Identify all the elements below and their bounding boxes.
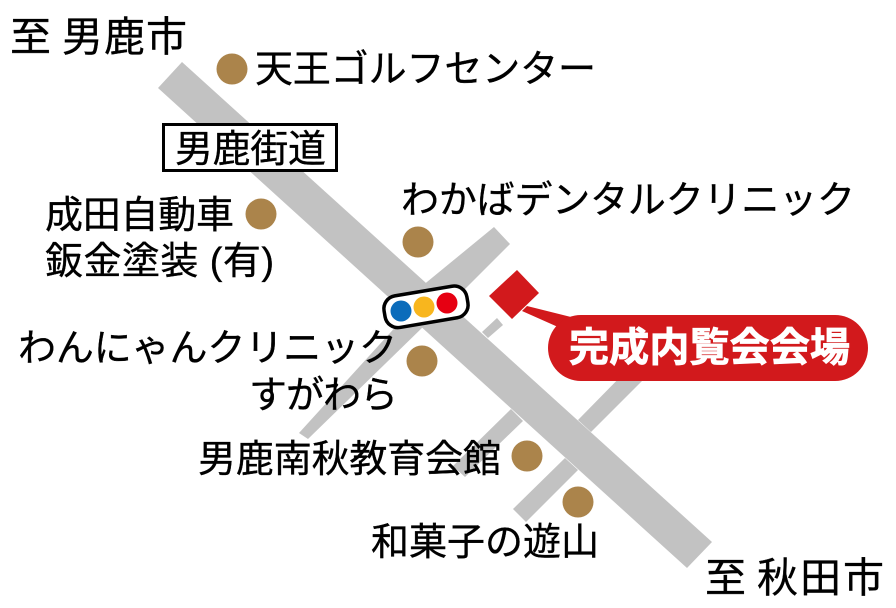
landmark dot: dental clinic [402, 226, 434, 258]
label: Narita auto body: 鈑金塗装 (有) [45, 241, 274, 283]
label: Wannyan clinic Sugawara [18, 328, 398, 417]
label: Wannyan clinic Sugawara: すがわら [249, 375, 398, 417]
label: Wakaba dental clinic: わかばデンタルクリニック [401, 180, 855, 222]
label: Wannyan clinic Sugawara: わんにゃんクリニック [18, 328, 397, 370]
landmark dot: community hall [512, 440, 542, 472]
road: lower cross street, east part [578, 367, 656, 432]
traffic signal [382, 284, 470, 330]
label: Narita auto body: 成田自動車 [45, 195, 234, 237]
label: golf center: 天王ゴルフセンター [255, 49, 596, 91]
road: upper cross street, south part [299, 322, 425, 439]
callout: venue: 完成内覧会会場 [569, 326, 850, 370]
road: left branch [453, 409, 523, 477]
label: community hall: 男鹿南秋教育会館 [198, 439, 501, 481]
label: to Akita city: 至 [705, 555, 746, 601]
road: main Oga highway [158, 62, 712, 568]
label: to Oga city: 男鹿市 [62, 14, 187, 60]
road name box: 男鹿街道 [175, 129, 326, 171]
label: to Oga city: 至 [10, 14, 51, 60]
landmark dot: sweets shop [562, 486, 594, 518]
label: sweets shop: 和菓子の遊山 [371, 522, 599, 564]
road: upper cross street, north part [405, 227, 510, 314]
callout: venue [548, 315, 868, 381]
venue marker with pointer [489, 270, 575, 327]
landmark dot: animal clinic [406, 346, 438, 376]
road: short stub [482, 318, 503, 338]
label: to Akita city: 秋田市 [757, 555, 884, 601]
road: lower cross street, west part [513, 458, 578, 522]
landmark dot: golf center [216, 54, 248, 84]
landmark dot: Narita auto body [246, 198, 276, 230]
label: Narita auto body [45, 195, 274, 283]
